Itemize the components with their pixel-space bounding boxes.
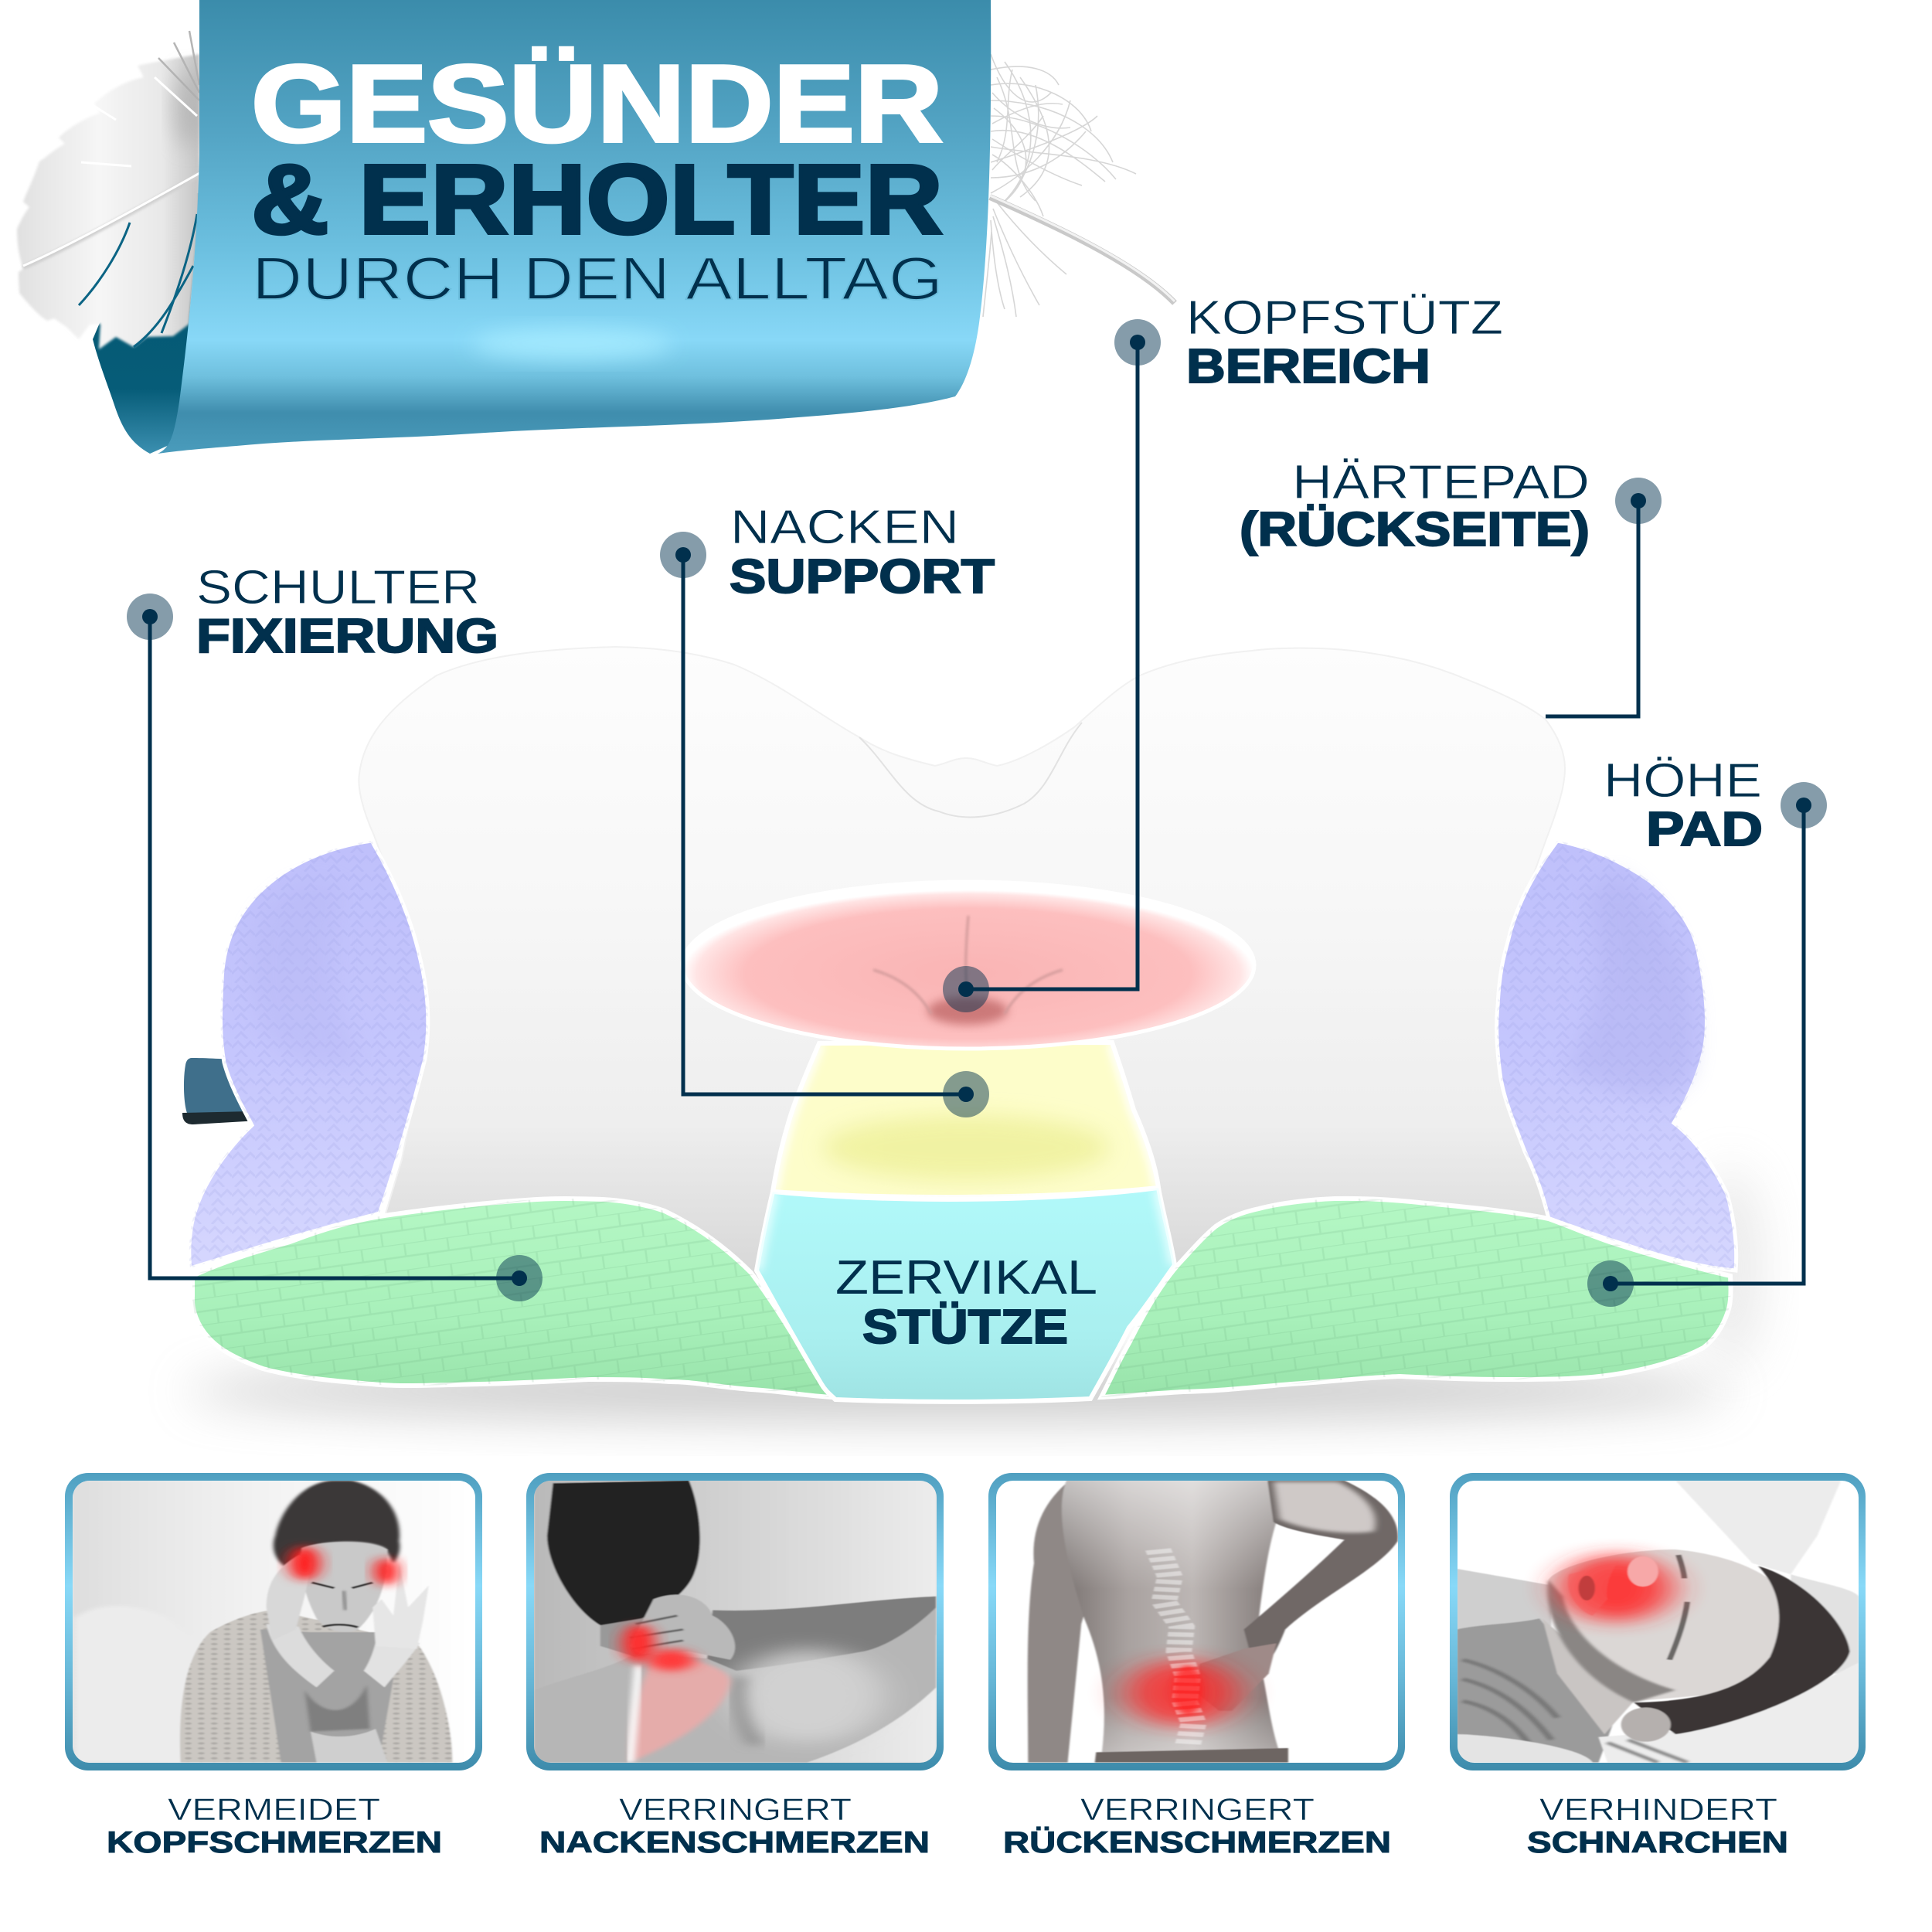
- panel: benefit card headaches: [65, 1473, 482, 1770]
- title line 1: GESÜNDER: [251, 43, 943, 165]
- zone label: Zervikal Stütze: ZERVIKAL: [835, 1251, 1097, 1304]
- caption: Verhindert Schnarchen: SCHNARCHEN: [1527, 1826, 1788, 1859]
- panel: green right shoulder: [1101, 1199, 1731, 1397]
- label: Nacken Support: NACKEN: [730, 501, 959, 554]
- label: Nacken Support: [730, 501, 995, 604]
- caption: Verhindert Schnarchen: [1527, 1793, 1788, 1859]
- label: Schulter Fixierung: SCHULTER: [196, 561, 480, 614]
- panel: benefit card neck pain: [526, 1473, 944, 1770]
- caption: Verhindert Schnarchen: VERHINDERT: [1539, 1793, 1777, 1827]
- label: Kopfstütz Bereich: BEREICH: [1186, 340, 1430, 393]
- pillow head crease: [859, 723, 1082, 817]
- caption: Verringert Rückenschmerzen: [1003, 1793, 1391, 1859]
- label: Kopfstütz Bereich: [1186, 291, 1503, 393]
- title line 2: & ERHOLTER: [251, 145, 943, 255]
- title line 3: DURCH DEN ALLTAG: [252, 244, 943, 312]
- panel: benefit card snoring: [1450, 1473, 1866, 1770]
- photo: man holding neck: [534, 1481, 937, 1763]
- icon: feather right wisps and quill: [983, 54, 1175, 317]
- caption: Verringert Nackenschmerzen: NACKENSCHMERZEN: [539, 1826, 930, 1859]
- label: Höhe Pad: HÖHE: [1604, 754, 1762, 808]
- zone label: Zervikal Stütze: [835, 1251, 1097, 1354]
- panel: purple right height pad: [1497, 841, 1736, 1270]
- caption: Vermeidet Kopfschmerzen: VERMEIDET: [168, 1793, 380, 1827]
- caption: Verringert Rückenschmerzen: RÜCKENSCHMERZEN: [1003, 1826, 1391, 1859]
- label: Härtepad Rückseite: (RÜCKSEITE): [1240, 503, 1590, 556]
- callout: Höhe connector: [1587, 782, 1827, 1307]
- caption: Verringert Nackenschmerzen: VERRINGERT: [619, 1793, 852, 1827]
- icon: feather left: [17, 31, 205, 349]
- label: Schulter Fixierung: FIXIERUNG: [196, 610, 498, 663]
- callout: Kopfstütz connector: [943, 319, 1161, 1012]
- panel: title ribbon: [158, 0, 991, 454]
- panel: yellow neck support zone: [773, 1043, 1158, 1197]
- panel: pillow body: [359, 647, 1565, 1283]
- caption: Vermeidet Kopfschmerzen: KOPFSCHMERZEN: [107, 1826, 442, 1859]
- photo: woman with headache: [73, 1481, 475, 1763]
- label: Schulter Fixierung: [196, 561, 498, 663]
- callout: Nacken connector: [660, 532, 989, 1117]
- callout: Härtepad connector: [1546, 478, 1662, 716]
- pillow shadow: [185, 1167, 1762, 1420]
- photo: sleeping man snoring: [1457, 1481, 1859, 1763]
- panel: cyan cervical support zone: [757, 1188, 1175, 1402]
- panel: purple left height pad: [189, 841, 428, 1268]
- callout: Schulter connector: [127, 594, 543, 1301]
- caption: Verringert Rückenschmerzen: VERRINGERT: [1080, 1793, 1315, 1827]
- caption: Verringert Nackenschmerzen: [539, 1793, 930, 1859]
- panel: green left shoulder: [192, 1199, 832, 1397]
- label: Höhe Pad: [1604, 754, 1763, 856]
- label: Nacken Support: SUPPORT: [730, 550, 995, 604]
- photo: man with back pain: [1028, 1481, 1398, 1763]
- icon: pillow tag: [182, 1058, 263, 1124]
- label: Härtepad Rückseite: [1240, 456, 1590, 556]
- caption: Vermeidet Kopfschmerzen: [107, 1793, 442, 1859]
- label: Härtepad Rückseite: HÄRTEPAD: [1292, 456, 1590, 509]
- label: Höhe Pad: PAD: [1646, 803, 1763, 856]
- zone label: Zervikal Stütze: STÜTZE: [862, 1301, 1068, 1354]
- panel: benefit card back pain: [988, 1473, 1405, 1770]
- panel: red head support zone: [682, 882, 1254, 1049]
- ribbon back fold: [93, 193, 199, 454]
- label: Kopfstütz Bereich: KOPFSTÜTZ: [1186, 291, 1503, 345]
